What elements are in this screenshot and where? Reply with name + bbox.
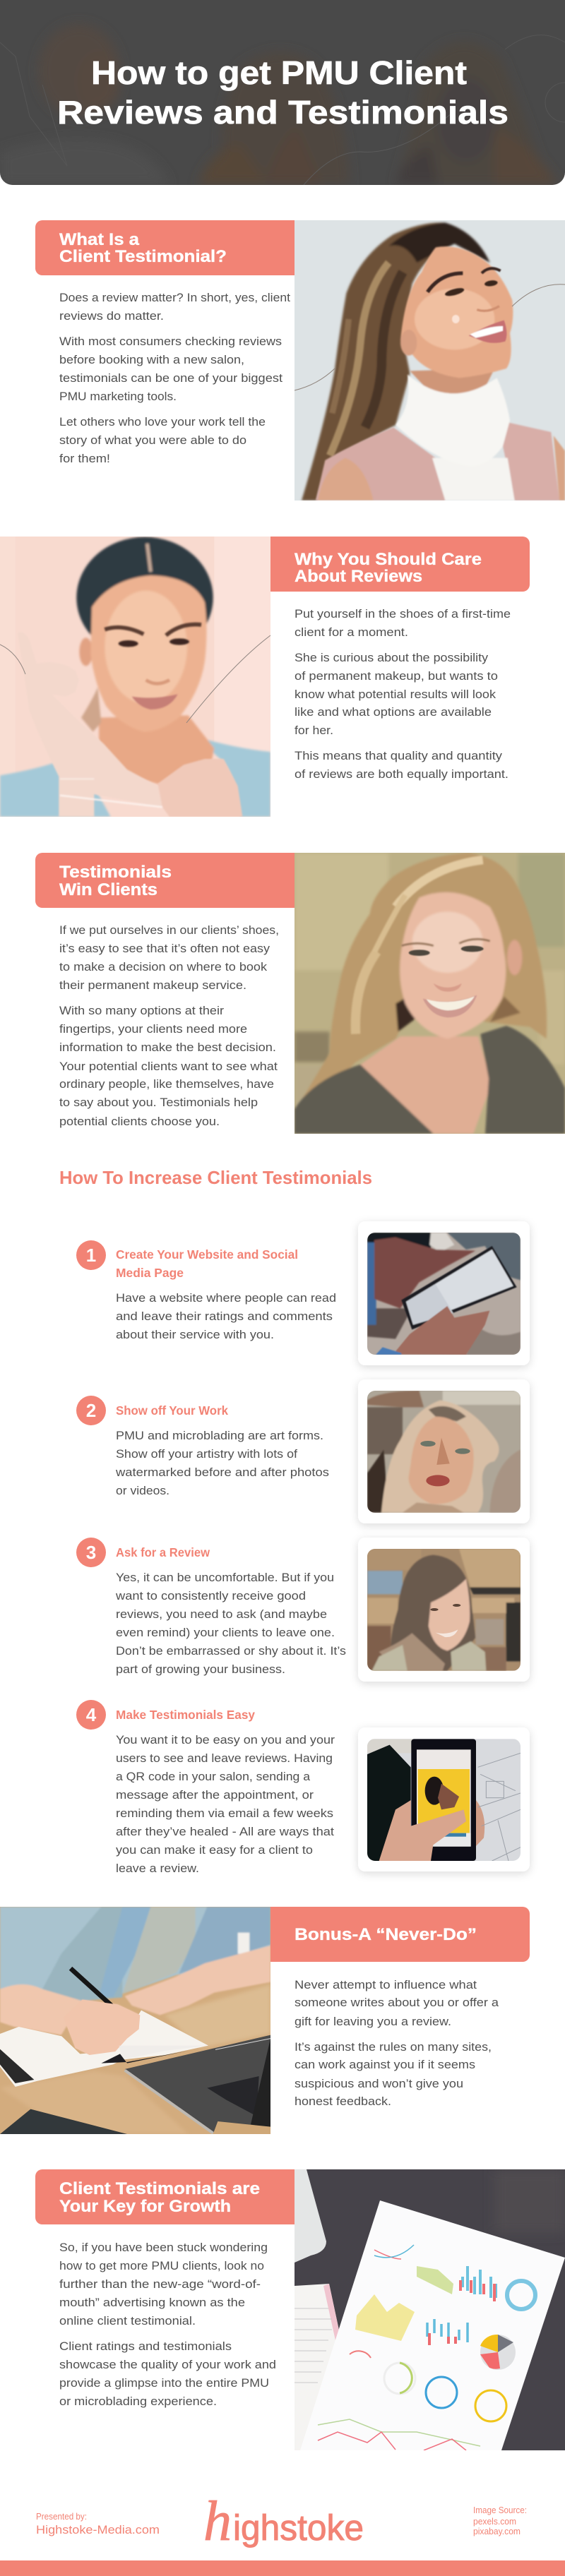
- body text: [295, 1978, 499, 2108]
- step text: you can make it easy for a client to: [116, 1843, 313, 1857]
- heading bar: Client Testimonial?: [59, 247, 227, 266]
- step 2: show off your work: [76, 1379, 530, 1523]
- body text: information to make the best decision.: [59, 1041, 276, 1054]
- body text: before booking with a new salon,: [59, 353, 244, 366]
- body text: of reviews are both equally important.: [295, 767, 509, 781]
- step text: after they’ve healed - All are ways that: [116, 1825, 334, 1838]
- image source: pexels.com: [473, 2516, 516, 2527]
- step text: part of growing your business.: [116, 1663, 285, 1676]
- body text: know what potential results will look: [295, 688, 496, 701]
- step text: Have a website where people can read: [116, 1291, 336, 1305]
- body text: Your potential clients want to see what: [59, 1060, 278, 1073]
- body text: testimonials can be one of your biggest: [59, 371, 282, 385]
- body text: If we put ourselves in our clients’ shoes,: [59, 923, 279, 937]
- photo: smiling blonde woman: [295, 853, 565, 1134]
- heading bar: Win Clients: [59, 880, 157, 899]
- body text: This means that quality and quantity: [295, 749, 503, 762]
- step text: even remind) your clients to leave one.: [116, 1626, 335, 1639]
- body text: someone writes about you or offer a: [295, 1996, 499, 2009]
- photo card: blonde woman portrait: [358, 1379, 530, 1523]
- bottom band: [0, 2560, 565, 2576]
- photo: smiling woman in white turtleneck: [295, 220, 565, 501]
- number badge 1: 1: [86, 1245, 96, 1266]
- body text: So, if you have been stuck wondering: [59, 2241, 268, 2254]
- step text: watermarked before and after photos: [115, 1466, 329, 1479]
- step text: Yes, it can be uncomfortable. But if you: [116, 1571, 334, 1584]
- heading bar: Why You Should Care: [295, 550, 482, 569]
- presented by: Highstoke-Media.com: [36, 2523, 160, 2536]
- section heading: how to increase: How To Increase Client Testimonials: [59, 1167, 372, 1188]
- body text: reviews do matter.: [59, 309, 164, 323]
- body text: showcase the quality of your work and: [59, 2358, 276, 2371]
- photo: writing in a notebook beside a laptop: [0, 1907, 270, 2134]
- logo: h: [203, 2491, 232, 2553]
- logo: [203, 2491, 364, 2553]
- body text: provide a glimpse into the entire PMU: [59, 2376, 269, 2390]
- heading bar: [35, 853, 295, 908]
- body text: fingertips, your clients need more: [59, 1022, 247, 1036]
- body text: online client testimonial.: [59, 2314, 196, 2328]
- body text: how to get more PMU clients, look no: [59, 2259, 264, 2272]
- panel: client testimonials key for growth: [35, 2169, 565, 2450]
- header banner: [0, 0, 565, 185]
- body text: to say about you. Testimonials help: [59, 1096, 258, 1109]
- body text: Client ratings and testimonials: [59, 2340, 232, 2353]
- step text: users to see and leave reviews. Having: [116, 1751, 333, 1765]
- body text: for them!: [59, 452, 110, 465]
- step title: Show off Your Work: [116, 1403, 228, 1418]
- body text: ordinary people, like themselves, have: [59, 1077, 274, 1091]
- number badge 4: 4: [86, 1704, 97, 1725]
- number badge 2: 2: [86, 1400, 96, 1421]
- body text: story of what you were able to do: [59, 433, 246, 447]
- step text: [116, 1291, 336, 1341]
- step text: PMU and microblading are art forms.: [116, 1429, 323, 1442]
- body text: She is curious about the possibility: [295, 651, 489, 664]
- number badge 1: [76, 1240, 106, 1270]
- body text: PMU marketing tools.: [59, 390, 177, 403]
- heading bar: [270, 537, 530, 592]
- body text: [59, 923, 279, 1128]
- body text: gift for leaving you a review.: [295, 2015, 451, 2028]
- image source: [473, 2505, 527, 2536]
- step text: or videos.: [116, 1484, 170, 1497]
- step text: Show off your artistry with lots of: [116, 1447, 297, 1461]
- step text: leave a review.: [116, 1862, 199, 1875]
- body text: potential clients choose you.: [59, 1115, 220, 1128]
- step 4: make testimonials easy: [76, 1700, 530, 1875]
- presented by: [36, 2511, 160, 2536]
- step title: Make Testimonials Easy: [116, 1708, 255, 1722]
- step 3: ask for a review: [76, 1538, 530, 1682]
- step title: Ask for a Review: [116, 1545, 210, 1559]
- body text: [59, 2241, 276, 2408]
- number badge 2: [76, 1396, 106, 1425]
- footer: [0, 2491, 565, 2576]
- logo: ighstoke: [233, 2508, 364, 2548]
- body text: for her.: [295, 724, 333, 737]
- heading bar: Bonus-A “Never-Do”: [295, 1925, 477, 1944]
- step text: reviews, you need to ask (and maybe: [116, 1607, 327, 1621]
- step text: and leave their ratings and comments: [116, 1310, 333, 1323]
- step text: reminding them via email a few weeks: [116, 1807, 333, 1820]
- step title: Media Page: [116, 1266, 184, 1280]
- heading bar: Client Testimonials are: [59, 2179, 260, 2198]
- number badge 3: [76, 1538, 106, 1567]
- heading bar: What Is a: [59, 230, 140, 249]
- step text: [115, 1429, 329, 1497]
- body text: to make a decision on where to book: [59, 960, 268, 974]
- body text: or microblading experience.: [59, 2395, 217, 2408]
- panel: what is a client testimonial: [35, 220, 565, 501]
- title: How to get PMU Client: [91, 54, 467, 91]
- photo card: brunette woman smiling: [358, 1538, 530, 1682]
- body text: Let others who love your work tell the: [59, 415, 266, 429]
- photo card: phone showing portrait: [358, 1727, 530, 1871]
- body text: client for a moment.: [295, 625, 408, 639]
- title: Reviews and Testimonials: [57, 94, 509, 131]
- photo: woman stretching a glove: [0, 537, 270, 817]
- step text: You want it to be easy on you and your: [116, 1733, 335, 1747]
- body text: mouth” advertising known as the: [59, 2296, 245, 2309]
- panel: why you should care about reviews: [0, 537, 530, 817]
- body text: like and what options are available: [295, 705, 492, 719]
- body text: Never attempt to influence what: [295, 1978, 477, 1991]
- step text: want to consistently receive good: [115, 1589, 306, 1602]
- presented by: Presented by:: [36, 2511, 87, 2522]
- body text: With most consumers checking reviews: [59, 335, 282, 348]
- mini charts: [318, 2245, 535, 2450]
- header background photo: [0, 0, 565, 185]
- photo card: phone in hands: [358, 1221, 530, 1365]
- step text: Don’t be embarrassed or shy about it. It’s: [116, 1644, 346, 1658]
- step text: [115, 1571, 346, 1676]
- panel: bonus never-do: [0, 1907, 530, 2134]
- title: [57, 54, 509, 131]
- body text: can work against you if it seems: [295, 2058, 475, 2071]
- body text: suspicious and won’t give you: [295, 2077, 463, 2090]
- heading bar: [35, 2169, 295, 2224]
- heading bar: [35, 220, 295, 275]
- step text: [116, 1733, 335, 1875]
- body text: of permanent makeup, but wants to: [295, 669, 498, 683]
- heading bar: [270, 1907, 530, 1962]
- body text: it’s easy to see that it’s often not easy: [59, 942, 270, 955]
- image source: pixabay.com: [473, 2526, 521, 2536]
- step text: message after the appointment, or: [116, 1788, 314, 1802]
- step title: Create Your Website and Social: [116, 1247, 298, 1262]
- body text: their permanent makeup service.: [59, 978, 246, 992]
- body text: honest feedback.: [295, 2095, 391, 2108]
- step text: a QR code in your salon, sending a: [116, 1770, 311, 1783]
- step 1: website: [76, 1221, 530, 1365]
- body text: Does a review matter? In short, yes, client: [59, 291, 290, 304]
- body text: It’s against the rules on many sites,: [295, 2040, 492, 2054]
- panel: testimonials win clients: [35, 853, 565, 1134]
- body text: further than the new-age “word-of-: [59, 2277, 261, 2291]
- body text: [295, 607, 511, 781]
- heading bar: Testimonials: [59, 863, 172, 882]
- step text: about their service with you.: [116, 1328, 274, 1341]
- number badge 4: [76, 1700, 106, 1730]
- image source: Image Source:: [473, 2505, 527, 2515]
- body text: With so many options at their: [59, 1004, 224, 1017]
- body text: [59, 291, 290, 465]
- heading bar: Your Key for Growth: [59, 2197, 231, 2216]
- heading bar: About Reviews: [295, 567, 422, 586]
- body text: Put yourself in the shoes of a first-time: [295, 607, 511, 621]
- step title: [116, 1247, 298, 1280]
- photo: printed charts on a dark desk: [295, 2169, 565, 2450]
- number badge 3: 3: [86, 1542, 96, 1563]
